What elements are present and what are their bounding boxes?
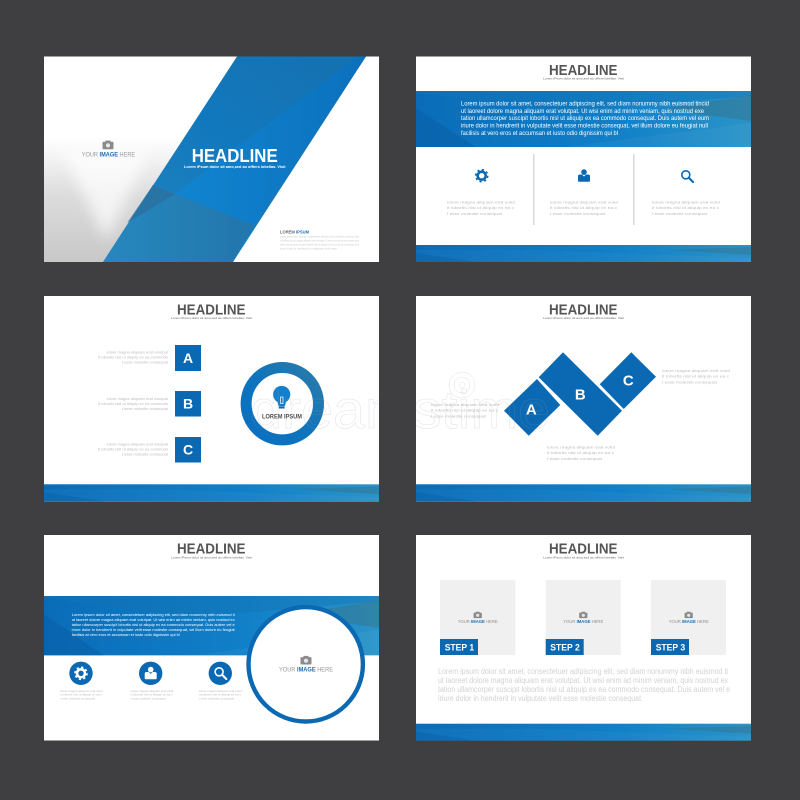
list text B: it lobortis nisl ut aliquip ex ea commodo: [98, 401, 169, 406]
column text 1: iolore magna aliquam erat volut: [447, 200, 516, 204]
text C: t esse molestie consequat: [662, 380, 718, 385]
icon: camera: [102, 141, 114, 149]
banner text: Lorem ipsum dolor sit amet, consectetuer adipiscing elit, sed diam nonummy nibh euismod ti: [72, 612, 235, 617]
caption 3: it lobortis nisl ut aliquip ex ea c: [199, 693, 242, 697]
step 3 card: [651, 580, 726, 655]
text C: [662, 368, 731, 385]
box C: [175, 437, 201, 462]
cover subtitle: Lorem iPsum dolor sit amo,sed ao offiers lobellas. Visit: [184, 165, 286, 169]
list text A: iolore magna aliquam erat volutpat: [107, 350, 169, 354]
diamond B: [539, 352, 622, 436]
list text A: t esse molestie consequat: [122, 360, 169, 364]
paragraph: iriure dolor in hendrerit in vulputate velit esse molestie consequat.: [438, 694, 643, 703]
column text 2: iolore magna aliquam erat volut: [550, 200, 619, 204]
blue diagonal band: [103, 56, 366, 262]
text A: [431, 402, 500, 419]
caption 1: iolore magna aliquam erat volut: [60, 689, 103, 693]
cover headline: HEADLINE: [192, 146, 278, 166]
list text C: [98, 442, 169, 456]
list text C: iolore magna aliquam erat volutpat: [107, 442, 169, 446]
icon: search: [682, 171, 693, 182]
headline: HEADLINE: [177, 302, 246, 318]
caption 2: t esse molestie consequat: [131, 696, 166, 700]
step 1 card: STEP 1: [445, 642, 475, 653]
image label: YOUR IMAGE HERE: [279, 668, 333, 674]
circle image placeholder: [249, 607, 363, 722]
banner text: tation ullamcorper suscipit lobortis nisl ut aliquip ex ea commodo consequat. Duis autem vel e: [72, 622, 235, 627]
banner text: tation ullamcorper suscipit lobortis nisl ut aliquip ex ea commodo consequat. Duis autem vel eum: [461, 116, 709, 122]
icon: camera: [300, 656, 312, 664]
column text 3: t esse molestie consequat: [652, 211, 708, 216]
diamond A: [504, 379, 560, 436]
cover note: ut laoreet dolore magna aliquam erat volutpat. Ut wisi enim ad minim veniam quis: [280, 238, 359, 242]
subtitle: Lorem iPsum dolor sit amo,sed ao offiers lobellas. Visit: [543, 77, 624, 81]
icon: gear: [476, 170, 488, 182]
cover note: Lorem ipsum dolor sit amet, consectetuer adipiscing elit, sed diam nonummy nibh: [280, 235, 359, 239]
text B: [547, 444, 616, 461]
watermark: dreamstime: [250, 380, 550, 440]
text B: it lobortis nisl ut aliquip ex ea c: [547, 450, 614, 455]
caption 3: iolore magna aliquam erat volut: [199, 689, 242, 693]
ring: [246, 368, 318, 440]
step 3 card: YOUR IMAGE HERE: [669, 619, 709, 624]
paragraph: Lorem ipsum dolor sit amet, consectetuer adipiscing elit, sed diam nonummy nibh euismod ti: [438, 667, 728, 676]
subtitle: Lorem iPsum dolor sit amo,sed ao offiers lobellas. Visit: [543, 316, 624, 320]
list text C: t esse molestie consequat: [122, 452, 169, 456]
list text A: it lobortis nisl ut aliquip ex ea commodo: [98, 354, 169, 360]
diamond C: C: [623, 372, 634, 390]
caption 1: it lobortis nisl ut aliquip ex ea c: [60, 693, 103, 697]
banner text: facilisis at vero eros et accumsan et iusto odio dignissim qui bl: [461, 131, 618, 137]
diamond C: [600, 352, 656, 409]
text C: it lobortis nisl ut aliquip ex ea c: [662, 374, 729, 379]
slide 1: cover: [44, 56, 379, 262]
step 1 card: [440, 580, 515, 655]
list text A: [98, 350, 169, 364]
slide 2: banner and three icons: [416, 56, 751, 262]
paragraph: ut laoreet dolore magna aliquam erat volutpat. Ut wisi enim ad minim veniam, quis nostrud ex: [438, 676, 728, 685]
caption 1: t esse molestie consequat: [60, 696, 95, 700]
text B: iolore magna aliquam erat volut: [547, 444, 616, 449]
box B: [175, 391, 201, 416]
slide 4: diamond steps: [416, 296, 751, 502]
headline: HEADLINE: [549, 302, 618, 318]
footer band: [44, 484, 379, 501]
headline: HEADLINE: [549, 63, 618, 79]
text C: iolore magna aliquam erat volut: [662, 368, 731, 373]
banner text: iriure dolor in hendrerit in vulputate velit esse molestie consequat, vel illum dolore eu feugiat: [72, 627, 236, 632]
headline: HEADLINE: [177, 542, 246, 558]
column text 3: [652, 200, 721, 216]
banner text: [72, 612, 236, 637]
list text B: [98, 396, 169, 411]
headline: HEADLINE: [549, 542, 618, 558]
banner text: [461, 102, 709, 137]
caption 3: t esse molestie consequat: [199, 696, 234, 700]
gray image placeholder: [44, 152, 174, 262]
step 3 card: STEP 3: [656, 642, 685, 653]
diamond A: A: [526, 402, 537, 418]
column text 1: it lobortis nisl ut aliquip ex ea c: [447, 205, 514, 210]
column text 2: [550, 200, 619, 216]
caption 2: it lobortis nisl ut aliquip ex ea c: [131, 693, 173, 697]
cover note: LOREM IPSUM: [280, 230, 309, 235]
list text C: it lobortis nisl ut aliquip ex ea commodo: [98, 446, 169, 452]
box A: A: [183, 350, 193, 366]
icon: user: [578, 169, 590, 182]
column text 2: t esse molestie consequat: [550, 211, 606, 216]
ring label: LOREM IPSUM: [262, 414, 302, 421]
list text B: t esse molestie consequat: [122, 406, 169, 411]
step 2 card: YOUR IMAGE HERE: [563, 619, 603, 624]
diamond B: B: [575, 386, 586, 404]
watermark: [252, 372, 548, 429]
step 1 card: YOUR IMAGE HERE: [458, 619, 498, 624]
banner text: facilisis at vero eros et accumsan et iusto odio dignissim qui bl: [72, 632, 180, 637]
caption 2: [131, 689, 174, 700]
subtitle: Lorem iPsum dolor sit amo,sed ao offiers lobellas. Visit: [171, 556, 252, 560]
caption 1: [60, 689, 103, 700]
text A: iolore magna aliquam erat volut: [431, 402, 500, 407]
box B: B: [183, 396, 193, 412]
text A: it lobortis nisl ut aliquip ex ea c: [431, 408, 498, 413]
cover note: tation ullamcorper suscipit lobortis nisl ut aliquip ex ea commodo consequat duis: [280, 242, 359, 246]
footer band: [416, 245, 751, 262]
subtitle: Lorem iPsum dolor sit amo,sed ao offiers lobellas. Visit: [171, 316, 252, 320]
column text 1: [447, 200, 516, 216]
slide 6: three steps: [416, 535, 751, 741]
text B: t esse molestie consequat: [547, 456, 603, 461]
image placeholder label: YOUR IMAGE HERE: [82, 152, 135, 158]
caption 3: [199, 689, 242, 700]
slide 3: A B C list with ring: [44, 296, 379, 502]
blue banner: [416, 91, 751, 147]
icon: light bulb: [273, 386, 290, 408]
caption 2: iolore magna aliquam erat volut: [131, 689, 174, 693]
cover note: irure dolor in hendrerit in vulputate velit esse: [280, 246, 337, 250]
banner text: iriure dolor in hendrerit in vulputate velit esse molestie consequat, vel illum dolore eu feugiat null: [461, 124, 708, 130]
banner text: ut laoreet dolore magna aliquam erat volutpat. Ut wisi enim ad minim veniam, quis nostrud ex: [72, 617, 235, 622]
column text 3: iolore magna aliquam erat volut: [652, 200, 721, 204]
footer band: [416, 724, 751, 741]
icon: search badge: [209, 662, 232, 685]
step 2 card: [546, 580, 621, 655]
blue banner: [44, 596, 379, 655]
column text 3: it lobortis nisl ut aliquip ex ea c: [652, 205, 719, 210]
banner text: ut laoreet dolore magna aliquam erat volutpat. Ut wisi enim ad minim veniam, quis nostrud exe: [461, 109, 705, 115]
icon: gear badge: [69, 662, 93, 685]
column text 1: t esse molestie consequat: [447, 211, 503, 216]
step 2 card: STEP 2: [550, 642, 580, 653]
paragraph: tation ullamcorper suscipit lobortis nisl ut aliquip ex ea commodo consequat. Duis autem vel e: [438, 685, 730, 694]
cover note: [280, 230, 359, 250]
slide 5: banner with circle image: [44, 535, 379, 740]
icon: user badge: [139, 662, 162, 685]
text A: t esse molestie consequat: [431, 414, 487, 419]
box C: C: [183, 442, 193, 458]
column text 2: it lobortis nisl ut aliquip ex ea c: [550, 205, 617, 210]
subtitle: Lorem iPsum dolor sit amo,sed ao offiers lobellas. Visit: [543, 556, 624, 560]
banner text: Lorem ipsum dolor sit amet, consectetuer adipiscing elit, sed diam nonummy nibh euismod tincid: [461, 102, 709, 108]
footer band: [416, 484, 751, 501]
list text B: iolore magna aliquam erat volutpat: [107, 396, 169, 401]
box A: [175, 345, 201, 371]
paragraph: [438, 667, 730, 703]
